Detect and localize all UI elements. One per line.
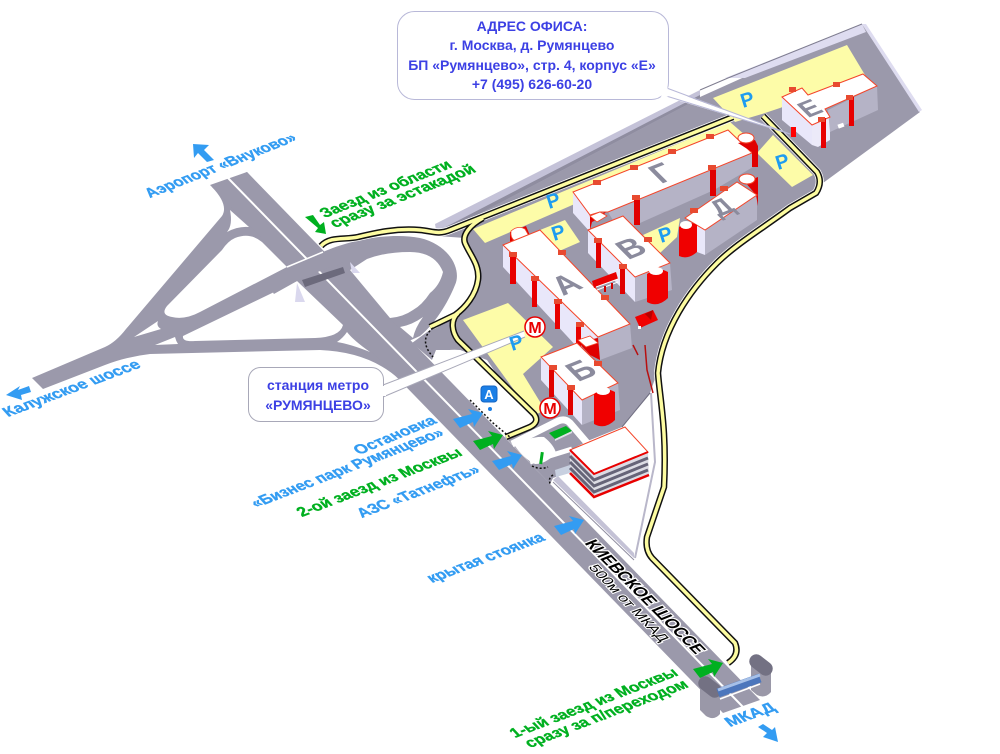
label: bus stop: Остановка bbox=[350, 413, 441, 458]
label: entry from region: Заезд из области bbox=[316, 157, 456, 221]
direction arrow: Kaluga highway bbox=[6, 386, 31, 400]
wall along the site bbox=[435, 90, 700, 236]
white ground near bus stop bbox=[432, 350, 525, 432]
roads with yellow line bbox=[321, 116, 820, 663]
letter Е: Е bbox=[791, 94, 829, 122]
green lane arrow bbox=[473, 431, 503, 450]
highway: Kyiv road bbox=[210, 172, 760, 713]
blue lane arrow bbox=[453, 409, 483, 428]
metro marker: М bbox=[543, 401, 557, 418]
callout pointer: metro bbox=[383, 331, 525, 397]
red fences bbox=[633, 345, 653, 393]
bus stop sign: А bbox=[484, 387, 494, 402]
metro marker: М bbox=[528, 320, 542, 337]
parking signs: Р bbox=[544, 189, 563, 214]
letter Б: Б bbox=[558, 353, 604, 387]
label: first entry: 1-ый заезд из Москвы bbox=[506, 665, 682, 741]
label: MKAD: МКАД bbox=[721, 700, 780, 730]
label: gas station: АЗС «Татнефть» bbox=[353, 462, 484, 521]
pedestrian bridge МКАД bbox=[695, 651, 776, 718]
gas station lanes bbox=[512, 420, 588, 477]
letter Д: Д bbox=[702, 193, 741, 221]
callout pointer: address bbox=[663, 87, 790, 134]
blue lane arrow bbox=[492, 451, 522, 470]
road interchange bbox=[32, 172, 457, 389]
parking signs bbox=[507, 88, 792, 356]
parking signs: Р bbox=[656, 223, 675, 248]
green lane arrow bbox=[693, 659, 723, 678]
label: Kaluga highway: Калужское шоссе bbox=[0, 357, 145, 420]
label: after underpass: сразу за п/переходом bbox=[521, 677, 692, 751]
metro callout: «РУМЯНЦЕВО» bbox=[265, 397, 371, 413]
green arrow: entry bbox=[305, 215, 326, 234]
gas station canopy bbox=[539, 426, 572, 464]
overpass bbox=[270, 252, 360, 302]
address callout: БП «Румянцево», стр. 4, корпус «Е» bbox=[408, 57, 656, 73]
metro marker bbox=[540, 398, 560, 418]
dashed road boundaries bbox=[426, 328, 553, 485]
parking garage bbox=[570, 427, 649, 497]
parking signs: Р bbox=[507, 331, 526, 356]
building Г bbox=[573, 130, 758, 232]
label: right after overpass: сразу за эстакадой bbox=[326, 162, 480, 231]
label: covered parking: крытая стоянка bbox=[423, 530, 550, 586]
bridge between А and В bbox=[592, 272, 618, 292]
label: distance from MKAD: 500м от МКАД bbox=[585, 563, 673, 644]
address callout: АДРЕС ОФИСА: bbox=[477, 18, 587, 34]
label: Vnukovo airport: Аэропорт «Внуково» bbox=[141, 130, 301, 201]
parking signs: Р bbox=[773, 150, 792, 175]
building Д bbox=[679, 174, 758, 257]
label: second entry: 2-ой заезд из Москвы bbox=[293, 445, 466, 520]
parking lots bbox=[463, 45, 865, 416]
letter А: А bbox=[543, 267, 589, 301]
label: business park: «Бизнес парк Румянцево» bbox=[247, 425, 448, 511]
site ground bbox=[412, 24, 923, 484]
building А bbox=[503, 226, 632, 360]
red tent bbox=[635, 310, 658, 329]
address callout: +7 (495) 626-60-20 bbox=[472, 76, 592, 92]
bus stop sign bbox=[481, 386, 497, 411]
direction arrow: Vnukovo bbox=[193, 144, 214, 162]
letter В: В bbox=[608, 231, 654, 265]
label: Kyiv highway: КИЕВСКОЕ ШОССЕ bbox=[580, 537, 710, 656]
metro marker bbox=[525, 317, 545, 337]
white ground under parking garage bbox=[553, 393, 668, 562]
building Б bbox=[541, 336, 620, 426]
building В bbox=[588, 216, 672, 304]
parking signs: Р bbox=[738, 88, 757, 113]
blue lane arrow bbox=[554, 516, 584, 535]
address callout bbox=[398, 12, 669, 100]
parking signs: Р bbox=[549, 221, 568, 246]
direction arrow: MKAD bbox=[758, 724, 778, 742]
letter Г: Г bbox=[641, 157, 683, 189]
building Е bbox=[782, 74, 878, 148]
metro callout: станция метро bbox=[267, 377, 369, 393]
metro callout bbox=[248, 368, 386, 422]
address callout: г. Москва, д. Румянцево bbox=[450, 37, 614, 53]
